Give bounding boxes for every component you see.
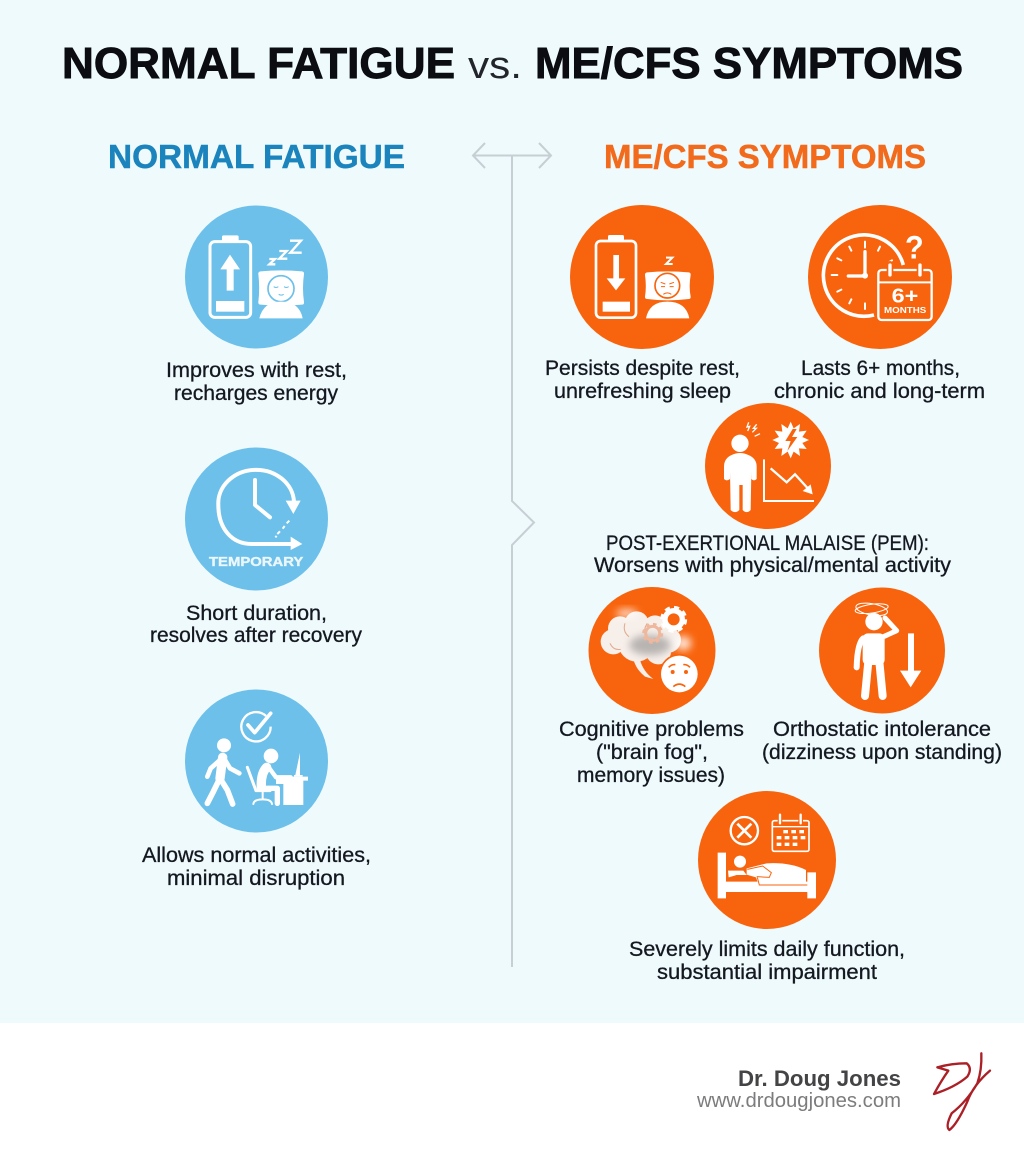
text: persists despite rest: Persists despite rest,	[545, 357, 740, 380]
text: post-exertional malaise: Worsens with physical/mental activity	[594, 554, 952, 577]
icon: bedridden person and calendar	[698, 791, 836, 929]
icon: red signature	[934, 1053, 990, 1130]
text: orthostatic intolerance	[762, 718, 1002, 764]
title: NORMAL FATIGUE	[62, 39, 455, 88]
text: allows normal activities	[142, 844, 371, 890]
heading: ME/CFS symptoms: ME/CFS SYMPTOMS	[604, 138, 926, 175]
icon: depleted battery and tired person	[570, 205, 714, 349]
icon: temporary clock	[185, 448, 328, 590]
panel: ME/CFS symptoms items	[545, 205, 1002, 984]
icon: clock and 6+ months calendar: 6+	[892, 285, 918, 307]
text: cognitive problems: memory issues)	[577, 764, 725, 787]
icon: walking and working people	[185, 690, 328, 832]
title: vs.	[468, 45, 522, 87]
text: severely limits daily function: substantial impairment	[657, 961, 877, 984]
icon: post-exertional crash	[705, 403, 831, 529]
text: orthostatic intolerance: Orthostatic intolerance	[773, 718, 991, 741]
text: persists despite rest: unrefreshing sleep	[554, 380, 731, 403]
text: allows normal activities: Allows normal activities,	[142, 844, 371, 867]
footer: author name and website	[696, 1066, 901, 1112]
heading: normal fatigue: NORMAL FATIGUE	[108, 138, 405, 175]
icon: clock and 6+ months calendar	[808, 205, 952, 349]
text: short duration	[150, 602, 362, 647]
icon: clock and 6+ months calendar: MONTHS	[884, 305, 927, 315]
icon: battery charging and sleeping person	[185, 206, 328, 348]
text: cognitive problems: Cognitive problems	[559, 718, 744, 741]
text: lasts 6+ months: chronic and long-term	[774, 380, 985, 403]
text: improves with rest	[166, 359, 347, 405]
text: allows normal activities: minimal disruption	[167, 867, 345, 890]
title	[62, 39, 963, 88]
text: improves with rest: recharges energy	[174, 382, 338, 405]
text: short duration: Short duration,	[186, 602, 327, 625]
text: persists despite rest	[545, 357, 740, 403]
text: post-exertional malaise: POST-EXERTIONAL MALAISE (PEM):	[606, 532, 929, 555]
text: orthostatic intolerance: (dizziness upon standing)	[762, 741, 1002, 764]
text: post-exertional malaise	[594, 532, 952, 577]
text: short duration: resolves after recovery	[150, 624, 362, 647]
title: ME/CFS SYMPTOMS	[535, 39, 963, 88]
panel: normal fatigue items	[142, 206, 371, 890]
text: lasts 6+ months: Lasts 6+ months,	[801, 357, 960, 380]
icon: temporary clock: TEMPORARY	[209, 555, 304, 569]
icon: clock and 6+ months calendar: ?	[905, 229, 924, 265]
arrow: central divider	[473, 143, 551, 967]
text: cognitive problems: ("brain fog",	[596, 741, 708, 764]
footer: author name and website: www.drdougjones.com	[696, 1090, 901, 1112]
text: cognitive problems	[559, 718, 744, 787]
footer: author name and website: Dr. Doug Jones	[738, 1066, 901, 1091]
text: severely limits daily function: Severely limits daily function,	[629, 938, 905, 961]
text: lasts 6+ months	[774, 357, 985, 403]
text: improves with rest: Improves with rest,	[166, 359, 347, 382]
icon: brain fog	[588, 587, 716, 714]
text: severely limits daily function	[629, 938, 905, 984]
icon: dizzy standing person	[819, 588, 945, 714]
footer panel	[0, 1023, 1024, 1154]
